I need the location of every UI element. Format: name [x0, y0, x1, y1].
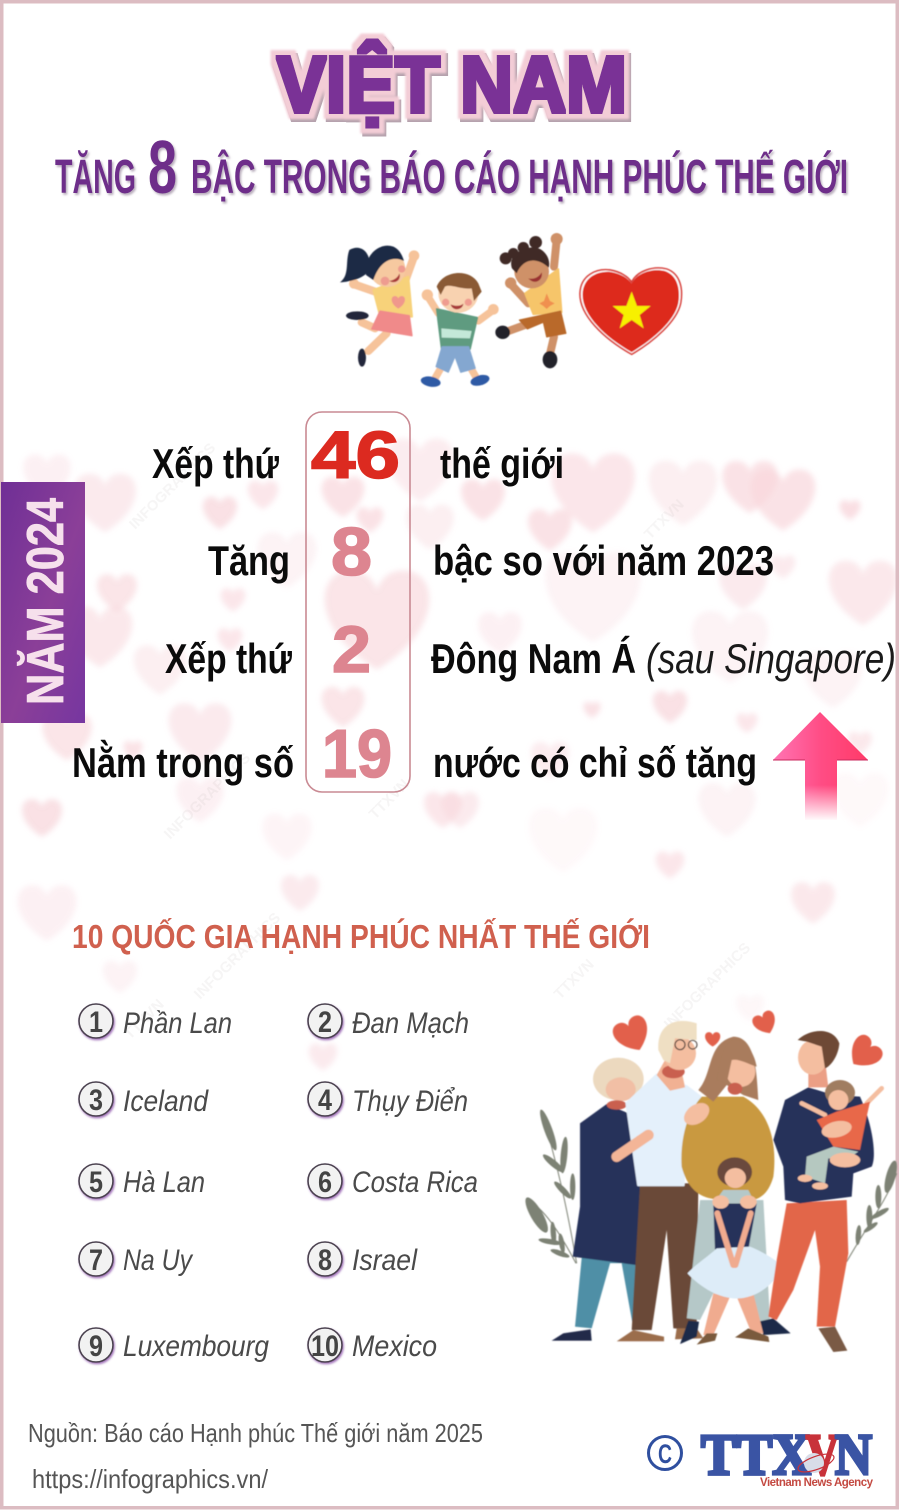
stat row: among 19 countries [72, 716, 757, 792]
logo: TTXVN Vietnam News Agency: Vietnam News Agency [760, 1477, 874, 1489]
watermarks: TTXVN [121, 996, 168, 1043]
watermarks: INFOGRAPHICS [661, 939, 754, 1033]
item 6 [308, 1164, 478, 1199]
watermarks: INFOGRAPHICS [161, 749, 254, 843]
item 10: 10 [311, 1330, 339, 1363]
logo: TTXVN Vietnam News Agency [648, 1422, 874, 1489]
stat row: rank 46: 46 [311, 418, 400, 493]
logo: TTXVN Vietnam News Agency: N [835, 1422, 872, 1487]
stat row: up 8: 8 [331, 514, 372, 590]
item 7: 7 [89, 1244, 103, 1277]
item 7 [79, 1242, 194, 1277]
stat row: second in Southeast Asia: Đông Nam Á [431, 635, 636, 682]
stat row: up 8: bậc so với năm 2023 [433, 537, 774, 584]
item 9: Luxembourg [123, 1330, 269, 1363]
subtitle: TĂNG [55, 150, 136, 204]
item 7: Na Uy [123, 1244, 194, 1277]
stat row: rank 46: thế giới [440, 440, 564, 487]
figure: girl in tutu [687, 1157, 783, 1345]
icon: right branch [847, 1159, 899, 1262]
watermarks: INFOGRAPHICS [191, 909, 284, 1003]
icon: girl jumping [340, 246, 419, 367]
badge: year 2024 [1, 482, 85, 723]
item 9: 9 [89, 1330, 103, 1363]
figure: mother [680, 1037, 791, 1344]
stat row: second in Southeast Asia: Xếp thứ [165, 635, 292, 682]
item 1: Phần Lan [123, 1007, 232, 1040]
watermarks [121, 439, 754, 1043]
watermarks: TTXVN [551, 956, 598, 1003]
icon: boy jumping [420, 273, 499, 388]
item 8: 8 [318, 1244, 332, 1277]
stat row: second in Southeast Asia: 2 [332, 612, 371, 686]
stat row: among 19 countries: nước có chỉ số tăng [433, 739, 757, 786]
watermarks: TTXVN [366, 776, 413, 823]
item 8 [308, 1242, 418, 1277]
item 6: 6 [318, 1166, 332, 1199]
item 6: Costa Rica [352, 1166, 478, 1199]
icon: dark-haired child jumping [495, 233, 566, 368]
watermarks: TTXVN [641, 496, 688, 543]
stat row: among 19 countries: Nằm trong số [72, 738, 294, 786]
stat row: rank 46: Xếp thứ [152, 440, 279, 487]
item 4: Thụy Điển [352, 1085, 468, 1118]
item 5 [79, 1164, 205, 1199]
subtitle [55, 125, 848, 209]
logo: TTXVN Vietnam News Agency: C [658, 1439, 672, 1469]
figure: father [768, 1031, 874, 1352]
stat row: rank 46 [152, 418, 564, 493]
figure: child in father's arms [798, 1080, 882, 1190]
item 2 [308, 1004, 469, 1040]
watermarks: INFOGRAPHICS [126, 439, 219, 533]
item 1 [79, 1004, 232, 1040]
icon: red hearts [610, 1009, 886, 1075]
item 4: 4 [318, 1084, 332, 1117]
item 10: Mexico [352, 1330, 437, 1363]
item 9 [79, 1328, 269, 1363]
stat row: second in Southeast Asia [165, 612, 896, 686]
badge: year 2024: NĂM 2024 [17, 498, 75, 705]
website url: https://infographics.vn/ [32, 1464, 269, 1494]
item 5: Hà Lan [123, 1166, 205, 1199]
item 2: Đan Mạch [352, 1007, 469, 1040]
list: top 10 countries [79, 1004, 478, 1363]
item 2: 2 [318, 1006, 332, 1039]
item 5: 5 [89, 1166, 103, 1199]
icon: left branch [521, 1108, 577, 1263]
background hearts [18, 438, 897, 1070]
icon: heart with Vietnamese flag star [580, 268, 682, 354]
illustration: family [521, 1009, 899, 1352]
item 3 [79, 1082, 209, 1118]
item 4 [308, 1082, 468, 1118]
illustration: happy children [340, 233, 682, 388]
logo: TTXVN Vietnam News Agency: V [806, 1422, 839, 1487]
stat row: among 19 countries: 19 [322, 716, 392, 792]
number column frame [306, 412, 410, 792]
item 8: Israel [352, 1244, 418, 1277]
stat row: up 8: Tăng [208, 537, 290, 584]
arrow: up [773, 712, 868, 821]
figure: grandfather [617, 1021, 703, 1341]
heading: top 10 happiest countries: 10 QUỐC GIA HẠNH PHÚC NHẤT THẾ GIỚI [72, 917, 650, 955]
stat row: up 8 [208, 514, 774, 590]
title: VIỆT NAM [277, 40, 627, 129]
logo: TTXVN Vietnam News Agency: TTX [701, 1422, 811, 1487]
item 3: Iceland [123, 1085, 209, 1118]
subtitle: 8 [148, 125, 177, 209]
item 1: 1 [89, 1006, 103, 1039]
source text: Nguồn: Báo cáo Hạnh phúc Thế giới năm 2025 [28, 1418, 483, 1448]
figure: grandmother [552, 1058, 644, 1341]
item 3: 3 [89, 1084, 103, 1117]
item 10 [308, 1328, 437, 1363]
